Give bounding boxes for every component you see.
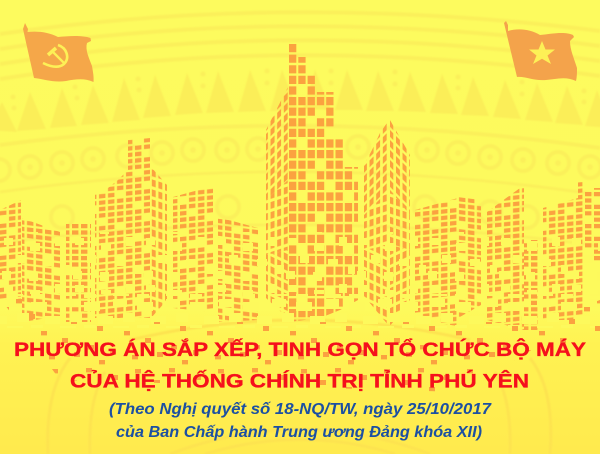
subtitle line 1: (Theo Nghị quyết số 18-NQ/TW, ngày 25/10/2017: [109, 401, 492, 418]
top curved stripes: [0, 12, 600, 79]
title: [14, 337, 586, 392]
building: right group 2: [487, 188, 538, 330]
title line 1: PHƯƠNG ÁN SẮP XẾP, TINH GỌN TỔ CHỨC BỘ MÁY: [14, 337, 586, 361]
building: far left: [0, 200, 60, 322]
building: far right: [543, 182, 600, 320]
mid stripes: [0, 126, 600, 246]
city skyline: [0, 44, 600, 392]
faint emblem at bottom: [48, 320, 551, 454]
building: central tall tower: [266, 44, 358, 322]
star: [529, 41, 555, 64]
rings row: [0, 136, 600, 228]
building: left tall: [95, 138, 167, 318]
flag: Communist Party: [23, 23, 94, 82]
building: right-of-centre tower: [364, 120, 410, 326]
scattered windows under the skyline: [0, 298, 600, 392]
title line 2: CỦA HỆ THỐNG CHÍNH TRỊ TỈNH PHÚ YÊN: [70, 368, 529, 392]
hammer and sickle: [43, 45, 67, 67]
subtitle: [109, 401, 492, 441]
triangle dots: [10, 68, 586, 110]
building: right group 1: [415, 197, 481, 326]
window gaps in lower floors: [0, 232, 600, 294]
building: centre-left: [173, 186, 258, 322]
subtitle line 2: của Ban Chấp hành Trung ương Đảng khóa XII): [116, 424, 482, 441]
building: second left: [66, 224, 91, 322]
triangle row: [0, 70, 600, 132]
flag: Vietnam: [504, 21, 577, 81]
dissolving base of skyline: [0, 294, 600, 328]
